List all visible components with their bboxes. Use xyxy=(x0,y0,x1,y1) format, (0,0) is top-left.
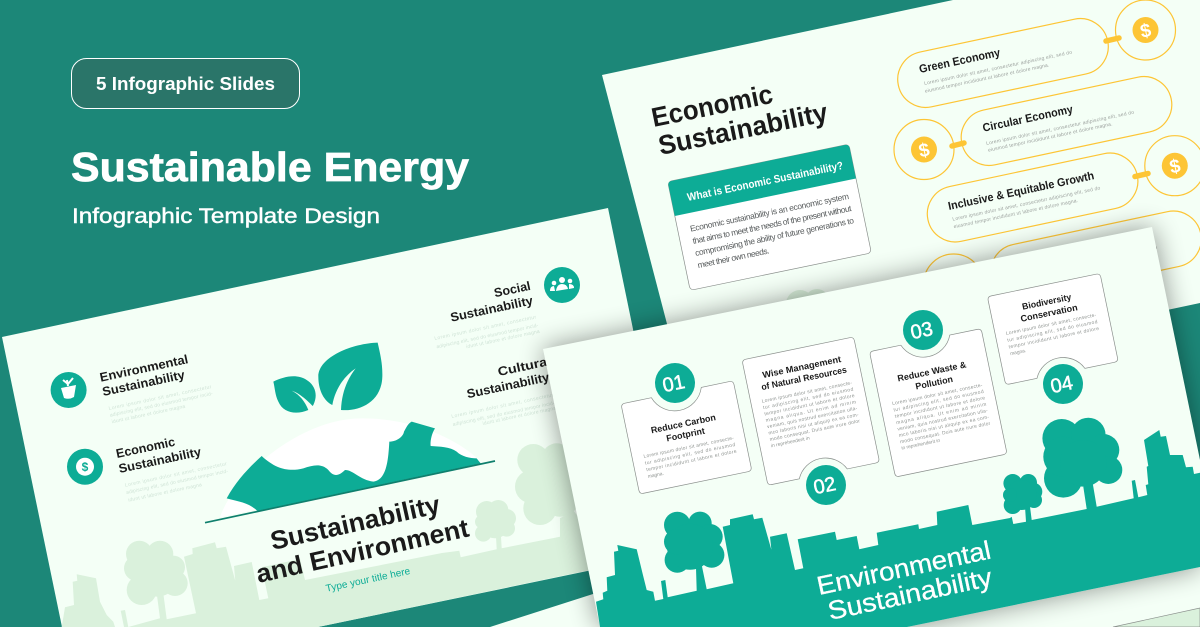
card 02: Wise Management of Natural Resources: Lorem ipsum dolor sit amet, consecte- xyxy=(761,380,853,405)
card 01: Reduce Carbon Footprint: Reduce Carbon xyxy=(650,412,717,435)
item: Economic Sustainability xyxy=(115,435,229,504)
card: What is Economic Sustainability xyxy=(668,144,871,290)
card 01: Reduce Carbon Footprint: Lorem ipsum dolor sit amet, consecte- xyxy=(643,435,735,460)
pill: Inclusive and Equitable Growth: $ xyxy=(1168,156,1183,179)
badge: 5 Infographic Slides xyxy=(72,58,300,108)
pale skyline xyxy=(62,443,679,627)
subtitle: Infographic Template Design: Infographic Template Design xyxy=(72,205,380,228)
pill: fourth item partly hidden xyxy=(924,206,1200,314)
card 03: Reduce Waste and Pollution: tempor incididunt ut labore et dolore xyxy=(894,395,986,420)
card 02: Wise Management of Natural Resources: Wise Management xyxy=(761,354,842,380)
title: Sustainable Energy: Sustainable Energy xyxy=(71,144,469,190)
card 04: Biodiversity Conservation: Lorem ipsum dolor sit amet, consecte- xyxy=(1005,312,1097,337)
title: Environmental Sustainability xyxy=(814,535,995,626)
number badge 04: 04 xyxy=(1049,372,1075,398)
card 02: Wise Management of Natural Resources xyxy=(742,337,880,485)
card 02: Wise Management of Natural Resources: magna aliqua. Ut enim ad minim xyxy=(765,399,857,424)
pill: Circular Economy xyxy=(894,71,1177,180)
panel: bottom partial slide xyxy=(490,500,1200,627)
item: Environmental Sustainability: Environmental xyxy=(99,352,189,385)
pill: Circular Economy: $ xyxy=(917,140,932,162)
card 02: Wise Management of Natural Resources: modo consequat. Duis aute irure dolor xyxy=(769,418,861,443)
subtitle: Type your title here: Type your title here xyxy=(325,566,412,595)
card: What is Economic Sustainability: meet their own needs. xyxy=(697,245,770,270)
pill: fourth item partly hidden: do xyxy=(1151,245,1158,252)
item: Cultural Sustainability: Sustainability xyxy=(466,370,551,401)
item: Social Sustainability: Social xyxy=(493,279,532,300)
card 03: Reduce Waste and Pollution: in reprehenderit in xyxy=(901,438,941,452)
badge: 5 Infographic Slides: 5 Infographic Slides xyxy=(96,74,275,94)
icon: dollar xyxy=(67,449,103,485)
item: Social Sustainability xyxy=(434,279,540,350)
card 02: Wise Management of Natural Resources: of Natural Resources xyxy=(760,365,848,392)
pill: Green Economy: eiusmod tempor incididunt ut labore et dolore magna. xyxy=(924,62,1050,95)
pill: Circular Economy: Circular Economy xyxy=(982,104,1075,135)
heading: Economic Sustainability: Sustainability xyxy=(656,97,830,161)
card: What is Economic Sustainability: compromising the ability of future generations to xyxy=(694,215,855,258)
title: Environmental Sustainability: Environmental xyxy=(814,535,993,601)
number badge 02: 02 xyxy=(812,473,838,499)
card 01: Reduce Carbon Footprint: tempor incididunt ut labore et dolore xyxy=(646,449,737,473)
icon: people xyxy=(544,267,580,303)
item: Environmental Sustainability xyxy=(99,352,214,425)
card 01: Reduce Carbon Footprint: Footprint xyxy=(665,426,706,443)
item: Environmental Sustainability: Lorem ipsum dolor sit amet, consectetur xyxy=(108,384,212,412)
pill: Inclusive and Equitable Growth: eiusmod tempor incididunt ut labore et dolore magna. xyxy=(953,198,1079,230)
pill: Green Economy: Lorem ipsum dolor sit amet, consectetur adipiscing elit, sed do xyxy=(924,50,1073,87)
card 04: Biodiversity Conservation: magna. xyxy=(1010,349,1027,357)
card 01: Reduce Carbon Footprint xyxy=(621,381,752,494)
number badge 02 xyxy=(806,465,846,505)
item: Social Sustainability: Sustainability xyxy=(449,293,534,325)
card 03: Reduce Waste and Pollution xyxy=(870,329,1007,477)
item: Economic Sustainability: adipiscing elit, sed do eiusmod tempor incid- xyxy=(126,468,229,496)
card 02: Wise Management of Natural Resources: mco laboris nisi ut aliquip ex ea com- xyxy=(768,412,860,437)
card: What is Economic Sustainability: Economic sustainability is an economic system xyxy=(689,191,850,234)
illustration: leaves and globe xyxy=(205,343,495,523)
icon: dollar: $ xyxy=(82,460,89,474)
pill: Circular Economy: Lorem ipsum dolor sit amet, consectetur adipiscing elit, sed do xyxy=(986,110,1135,147)
item: Environmental Sustainability: idunt ut labore et dolore magna xyxy=(111,404,186,425)
panel: Environmental Sustainability slide xyxy=(543,227,1200,627)
title: Sustainability and Environment: Sustainability xyxy=(267,489,443,556)
pill: Green Economy: Green Economy xyxy=(918,47,1002,76)
card 04: Biodiversity Conservation: Conservation xyxy=(1020,302,1078,324)
card 03: Reduce Waste and Pollution: Pollution xyxy=(915,374,954,391)
item: Environmental Sustainability: Sustainability xyxy=(101,368,186,399)
heading: Economic Sustainability: Economic xyxy=(649,79,775,133)
card 02: Wise Management of Natural Resources: tur adipiscing elit, sed do eiusmod xyxy=(763,387,854,411)
card 04: Biodiversity Conservation: Biodiversity xyxy=(1021,292,1072,312)
pill: Inclusive and Equitable Growth xyxy=(922,136,1200,247)
card 02: Wise Management of Natural Resources: veniam, quis nostrud exercitation ulla- xyxy=(767,406,858,430)
number badge 03: 03 xyxy=(909,318,935,344)
card 04: Biodiversity Conservation: tur adipiscing elit, sed do eiusmod xyxy=(1007,319,1098,344)
number badge 01: 01 xyxy=(661,371,687,397)
card 01: Reduce Carbon Footprint: magna. xyxy=(647,472,664,480)
item: Economic Sustainability: Economic xyxy=(115,435,176,461)
item: Cultural Sustainability: idunt ut labore et dolore magna xyxy=(482,405,557,427)
title: Sustainability and Environment: and Environment xyxy=(253,513,472,589)
card 01: Reduce Carbon Footprint: tur adipiscing elit, sed do eiusmod xyxy=(644,442,736,467)
item: Environmental Sustainability: adipiscing elit, sed do eiusmod tempor incid- xyxy=(109,391,214,419)
teal skyline xyxy=(596,418,1200,627)
card 03: Reduce Waste and Pollution: magna aliqua. Ut enim ad minim xyxy=(896,402,987,426)
icon: plant xyxy=(51,372,87,408)
pill: Inclusive and Equitable Growth: Inclusive & Equitable Growth xyxy=(947,170,1095,213)
pill: Green Economy: $ xyxy=(1138,20,1154,43)
pale tree tops xyxy=(786,289,829,318)
title: Environmental Sustainability: Sustainability xyxy=(825,562,995,626)
item: Social Sustainability: adipiscing elit, sed do eiusmod tempor incid- xyxy=(436,323,539,350)
slide shadow xyxy=(543,227,1200,627)
item: Cultural Sustainability: Lorem ipsum dolor sit amet, consectetur xyxy=(451,392,554,420)
card 03: Reduce Waste and Pollution: modo consequat. Duis aute irure dolor xyxy=(900,421,991,445)
item: Cultural Sustainability: Cultural xyxy=(497,354,552,379)
panel: Economic Sustainability slide xyxy=(602,0,1200,412)
item: Cultural Sustainability: adipiscing elit, sed do eiusmod tempor incid- xyxy=(452,400,555,428)
card 03: Reduce Waste and Pollution: Reduce Waste & xyxy=(897,359,968,383)
panel: Sustainability and Environment slide xyxy=(2,208,679,627)
card 03: Reduce Waste and Pollution: mco laboris nisi ut aliquip ex ea com- xyxy=(898,414,990,439)
item: Economic Sustainability: Sustainability xyxy=(117,445,202,476)
item: Cultural Sustainability xyxy=(451,354,557,428)
card: What is Economic Sustainability: What is Economic Sustainability? xyxy=(686,160,845,204)
number badge 03 xyxy=(903,310,943,350)
item: Social Sustainability: Lorem ipsum dolor sit amet, consectetur xyxy=(434,314,537,342)
pill: Green Economy xyxy=(893,0,1176,113)
item: Economic Sustainability: Lorem ipsum dolor sit amet, consectetur xyxy=(124,461,228,489)
card 04: Biodiversity Conservation: tempor incididunt ut labore et dolore xyxy=(1008,326,1100,350)
card 03: Reduce Waste and Pollution: Lorem ipsum dolor sit amet, consecte- xyxy=(892,382,983,407)
card 02: Wise Management of Natural Resources: in reprehenderit in xyxy=(771,435,811,449)
item: Economic Sustainability: idunt ut labore et dolore magna xyxy=(128,482,203,504)
pill: Circular Economy: eiusmod tempor incididunt ut labore et dolore magna. xyxy=(988,121,1113,154)
card 03: Reduce Waste and Pollution: tur adipiscing elit, sed do eiusmod xyxy=(893,389,985,413)
number badge 04 xyxy=(1043,364,1083,404)
card: What is Economic Sustainability: that aims to meet the needs of the present without xyxy=(692,203,853,246)
item: Social Sustainability: idunt ut labore et dolore magna xyxy=(466,329,540,350)
card 02: Wise Management of Natural Resources: tempor incididunt ut labore et dolore xyxy=(764,393,855,418)
card 03: Reduce Waste and Pollution: veniam, quis nostrud exercitation ulla- xyxy=(897,408,989,433)
pill: Inclusive and Equitable Growth: Lorem ipsum dolor sit amet, consectetur adipiscing elit, sed do xyxy=(952,185,1101,223)
number badge 01 xyxy=(655,363,695,403)
card 04: Biodiversity Conservation xyxy=(987,273,1118,385)
